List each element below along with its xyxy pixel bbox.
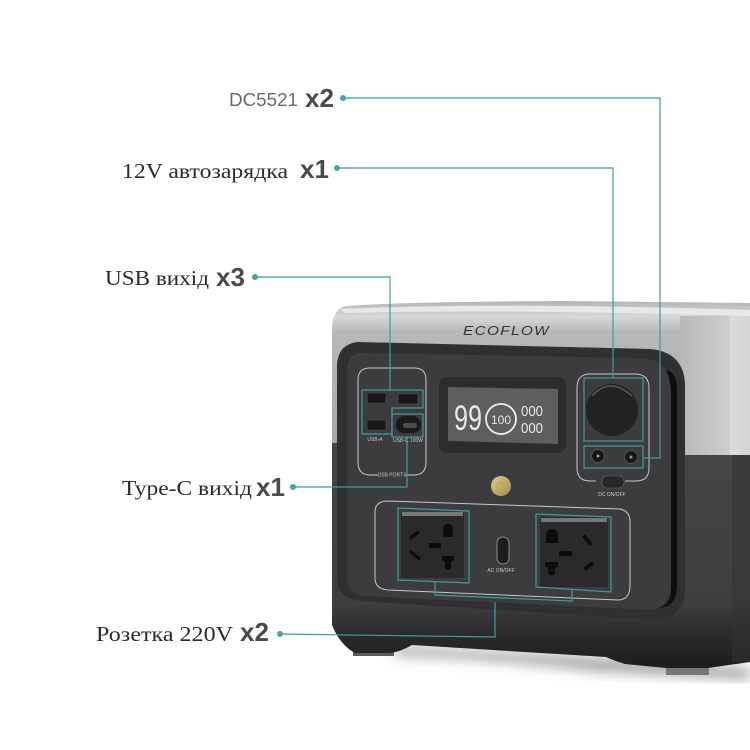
USB outline xyxy=(358,368,426,475)
USB ports group xyxy=(358,368,426,478)
feet xyxy=(353,645,709,675)
AC outlet outline xyxy=(375,501,630,600)
battery percent: 100 xyxy=(491,413,511,427)
floor shadow xyxy=(395,646,750,680)
DC panel xyxy=(577,374,649,498)
USB-A label: USB-A xyxy=(367,437,383,443)
outlet count: x2 xyxy=(240,617,269,647)
outlet label: Розетка 220V xyxy=(96,622,233,646)
left AC socket xyxy=(401,512,464,578)
battery percent ring xyxy=(486,404,516,434)
power button xyxy=(491,476,511,496)
Type-C count: x1 xyxy=(256,472,285,502)
DC on/off label: DC ON/OFF xyxy=(598,492,626,498)
DC5521 label: DC5521 xyxy=(229,90,298,110)
brand logo: ECOFLOW xyxy=(463,323,551,338)
silver side highlight xyxy=(680,316,750,455)
USB-A ports xyxy=(367,393,418,430)
callout: USB output xyxy=(105,262,423,434)
USB-C port xyxy=(396,416,421,433)
DC button xyxy=(602,476,624,488)
silver top lid xyxy=(332,301,750,455)
right AC socket xyxy=(540,517,608,587)
DC5521 sockets xyxy=(592,450,638,464)
LCD display: 000 xyxy=(521,420,543,437)
USB label: USB вихід xyxy=(105,266,209,290)
car charger socket xyxy=(586,384,638,436)
callout: Type-C output xyxy=(122,414,423,502)
front panel face xyxy=(347,353,671,610)
battery time digits: 99 xyxy=(454,399,482,438)
12V count: x1 xyxy=(300,154,329,184)
DC outline xyxy=(577,374,649,481)
dark lower body xyxy=(332,440,750,668)
power digits: 000 xyxy=(521,403,543,420)
AC button xyxy=(497,537,509,564)
USB count: x3 xyxy=(216,262,245,292)
DC5521 count: x2 xyxy=(305,83,334,113)
AC on/off label: AC ON/OFF xyxy=(487,568,515,574)
power station device xyxy=(332,301,750,680)
12V label: 12V автозарядка xyxy=(122,159,289,183)
right side dark panel xyxy=(732,455,750,662)
callout: 220V outlet xyxy=(96,508,611,647)
LCD display xyxy=(439,377,566,453)
callout: DC5521 xyxy=(229,83,660,468)
front panel outer frame xyxy=(337,342,685,620)
USB ports label: USB PORTS xyxy=(378,472,407,478)
Type-C label: Type-C вихід xyxy=(122,476,252,500)
USB-C label: USB-C 100W xyxy=(393,438,423,444)
callout: 12V car charging xyxy=(122,154,643,441)
